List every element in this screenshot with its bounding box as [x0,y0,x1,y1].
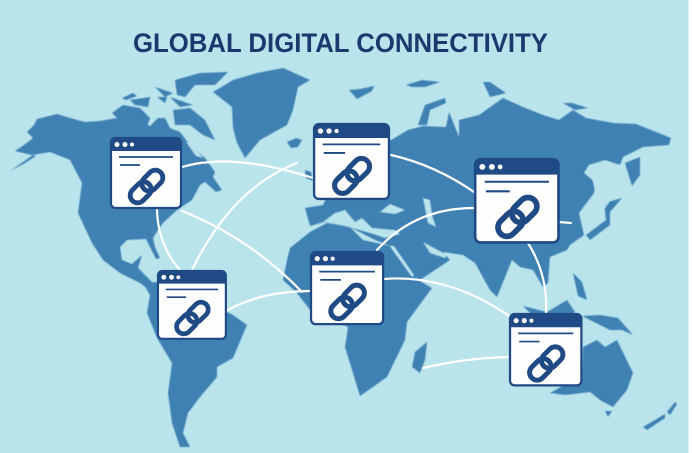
land: New Zealand [643,402,677,430]
land: Africa [283,223,432,396]
land: North America [10,114,222,289]
sea: Red Sea [390,246,414,277]
land: Tasmania [605,411,612,417]
browser window: Australia [510,314,581,385]
land: Britain [305,170,313,181]
browser window: Asia [475,159,558,242]
connection lines [157,155,571,368]
sea: Persian Gulf [423,242,447,258]
land: Svalbard and northern islands [349,80,588,125]
sea: Caspian [423,198,436,227]
sea: Sea of Japan [589,165,625,215]
browser window: North America [111,138,181,208]
land: Arctic islands [112,72,228,140]
land: Madagascar [412,342,427,373]
land: Greenland [213,68,310,158]
inland seas [186,142,625,277]
sea: Black Sea [380,204,405,214]
title: GLOBAL DIGITAL CONNECTIVITY [133,28,548,58]
browser window: Europe [314,124,389,199]
land: Eurasia [305,98,671,297]
browser window: South America [158,271,226,339]
land: Japan and Sakhalin [586,157,640,240]
land: Australia [550,340,633,407]
sea: Mediterranean [309,210,400,238]
land: South America [143,282,247,447]
sea: Hudson Straits [186,142,203,158]
land: Southeast Asia islands [523,273,633,335]
browser window: Africa [311,252,383,324]
land: Iceland [287,138,302,148]
